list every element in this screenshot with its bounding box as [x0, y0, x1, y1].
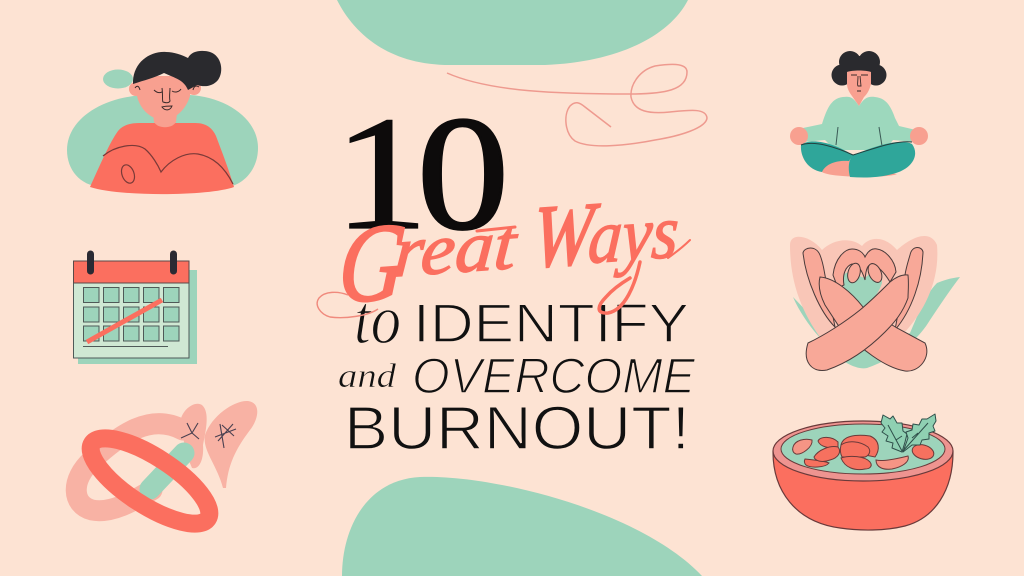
title letter: G: G: [335, 199, 410, 327]
title swash: y tail: [599, 262, 640, 313]
green band: [150, 453, 184, 489]
leg outline: [801, 142, 912, 155]
title: to: to: [354, 282, 401, 359]
soup ingredients: [793, 435, 935, 470]
title letter: W: W: [530, 184, 602, 287]
title swash: t crossbar: [477, 227, 515, 231]
title letters: ays: ays: [586, 189, 682, 280]
calendar rings: [90, 254, 174, 271]
title: Great Ways: [335, 178, 682, 327]
title: OVERCOME: OVERCOME: [412, 348, 696, 404]
green heart centre: [843, 272, 882, 309]
title digit 1: 1: [333, 84, 429, 264]
calendar day cells: [84, 288, 179, 341]
long finger right: [895, 247, 923, 330]
green backdrop: [67, 95, 258, 187]
cracks in right heart: [215, 424, 236, 448]
sleeve fold lines: [836, 127, 882, 146]
icon: salad bowl: [773, 414, 953, 530]
icon: tangled ring and hearts: [76, 401, 257, 539]
icon: crossed hands with heart: [790, 236, 960, 371]
right leg: [849, 142, 915, 178]
icon: exhausted woman: [67, 51, 258, 194]
cracks in left heart: [181, 423, 199, 439]
fingertips: [846, 262, 862, 284]
title swash: G tail loop: [317, 292, 378, 318]
red slash across calendar: [87, 300, 162, 342]
hair: [832, 51, 886, 86]
pale pink petals: [790, 236, 937, 340]
hair: [133, 51, 221, 90]
long finger left: [803, 248, 835, 327]
title: BURNOUT!: BURNOUT!: [344, 394, 690, 462]
garnish leaves: [881, 414, 936, 452]
title swash: s tail: [668, 240, 690, 258]
green leaf backdrop: [793, 277, 960, 368]
small green blob: [103, 70, 133, 88]
calendar page: [74, 261, 189, 358]
title digit 0: 0: [417, 84, 509, 264]
arched fingers forming heart: [833, 249, 896, 288]
calendar baseline rule: [83, 346, 168, 348]
title: and: and: [338, 358, 397, 395]
sweater pocket: [119, 163, 137, 185]
left hand: [790, 127, 808, 145]
coral foot: [822, 160, 897, 177]
arm going lower right: [819, 277, 927, 371]
title: IDENTIFY: IDENTIFY: [413, 292, 689, 354]
sweater arm lines: [103, 145, 233, 184]
face details: [851, 75, 868, 91]
left leg: [801, 141, 853, 172]
ears: [129, 82, 143, 96]
title letters: reat: reat: [391, 204, 521, 293]
green top: [803, 97, 916, 150]
right heart lobe: [205, 401, 257, 488]
bottom green blob: [342, 477, 702, 576]
title: 10: [333, 84, 509, 264]
face: [135, 76, 192, 120]
left heart lobe: [180, 404, 207, 468]
arm going lower left: [806, 275, 908, 370]
neck: [152, 105, 178, 127]
face and neck: [847, 70, 871, 106]
bowl body: [773, 452, 953, 530]
top green blob: [337, 0, 688, 65]
red ring: [79, 423, 221, 539]
soup surface: [781, 424, 945, 474]
bowl rim: [773, 421, 953, 481]
decorative coral squiggle: [447, 64, 707, 146]
calendar header: [74, 261, 189, 283]
pink tangled band: [76, 424, 183, 511]
icon: calendar: [74, 254, 197, 364]
face details: [135, 86, 199, 110]
icon: meditating person: [790, 51, 928, 178]
right hand: [910, 127, 928, 145]
calendar shadow: [78, 270, 197, 364]
coral sweater: [90, 123, 234, 194]
